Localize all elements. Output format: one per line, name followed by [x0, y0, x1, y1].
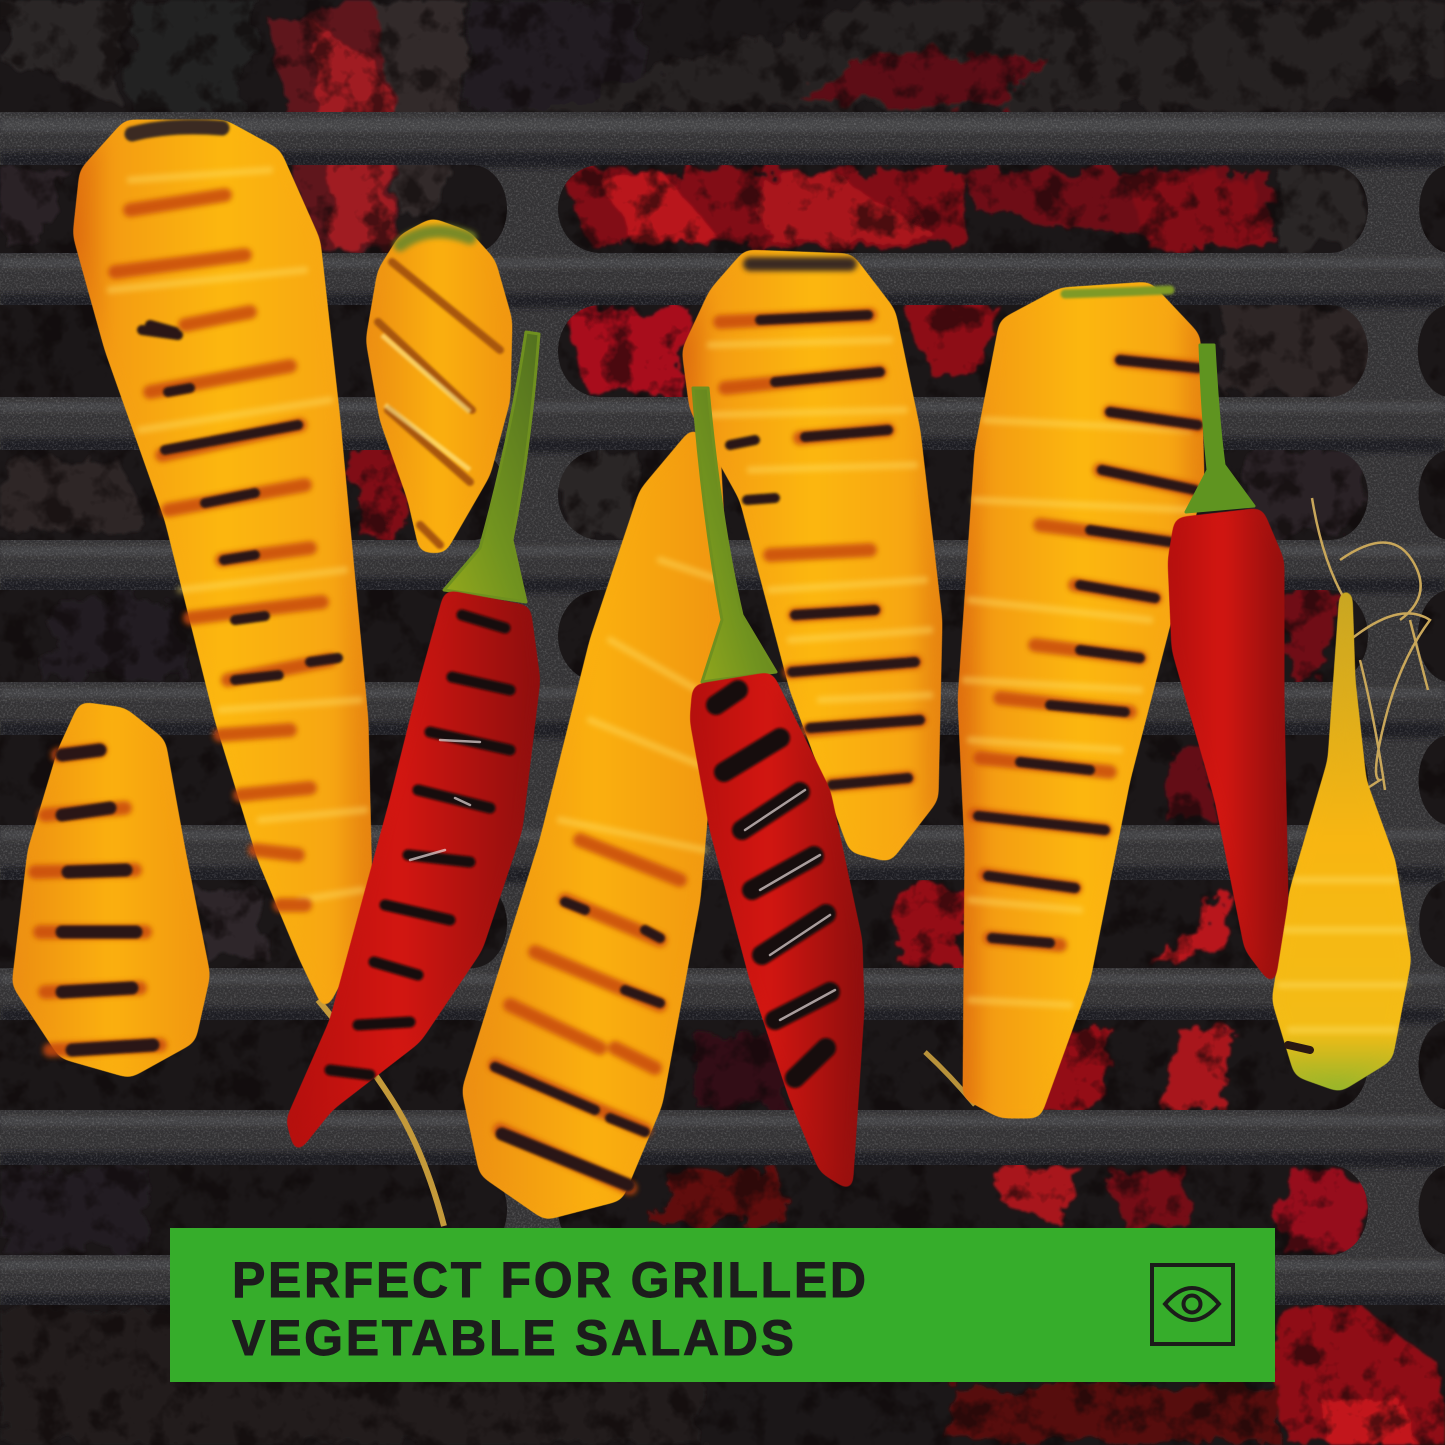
red chili pepper: left: [286, 332, 540, 1155]
banner: caption: [170, 1228, 1275, 1382]
heading text: VEGETABLE SALADS: [232, 1310, 794, 1366]
carrot: right tall: [925, 282, 1204, 1118]
carrot: center long: [462, 428, 726, 1220]
red chili pepper: center: [690, 388, 864, 1192]
root hairs: [1310, 498, 1430, 825]
carrot: small top wedge: [366, 218, 512, 553]
stem: [1186, 345, 1254, 512]
carrot: long left: [73, 120, 444, 1226]
carrot: small right with hair roots: [1272, 498, 1430, 1092]
stem: [444, 332, 539, 602]
carrot: short left piece: [12, 702, 210, 1078]
heading text: PERFECT FOR GRILLED: [232, 1252, 866, 1308]
stem: [693, 388, 776, 682]
carrot root: [925, 1052, 975, 1105]
carrot: center right: [682, 250, 942, 862]
icon: eye in square: [1152, 1265, 1233, 1344]
thin carrot root: [318, 1000, 444, 1226]
red chili pepper: right: [1168, 345, 1288, 988]
